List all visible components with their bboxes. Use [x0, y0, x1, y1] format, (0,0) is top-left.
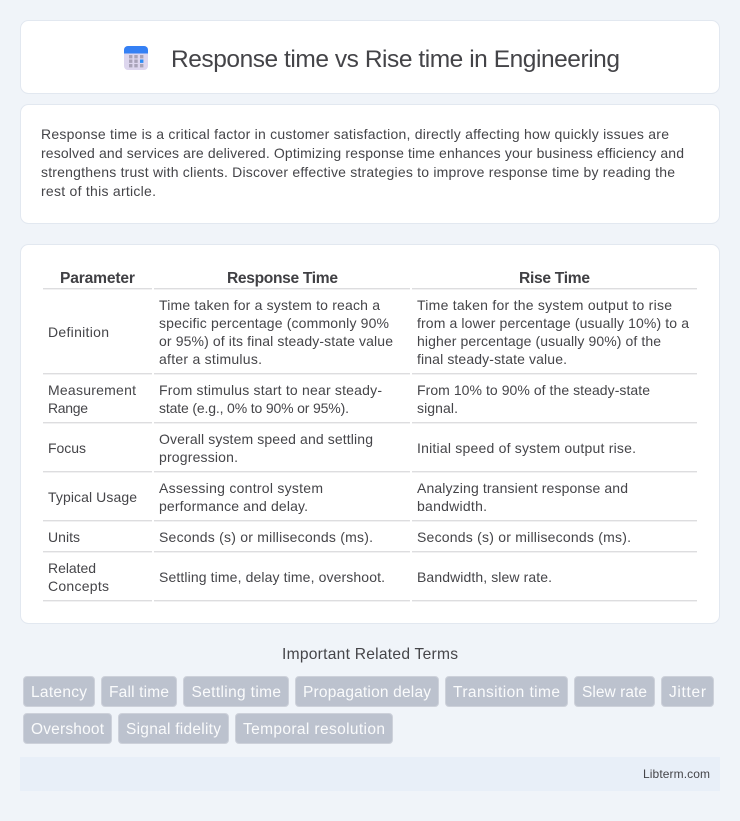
row: Typical Usage: Typical Usage: [48, 489, 137, 505]
row: Definition: after a stimulus.: [159, 351, 262, 367]
table header row: Rise Time: [519, 270, 590, 287]
tag: Propagation delay: Propagation delay: [303, 684, 431, 701]
heading: important related terms: Important Related Terms: [282, 646, 458, 663]
tag: Settling time: Settling time: [192, 684, 281, 701]
row: Definition: from a lower percentage (usually 10%) to a: [417, 315, 689, 331]
tag: Fall time: Fall time: [109, 684, 169, 701]
row: Units: Seconds (s) or milliseconds (ms).: [159, 529, 373, 545]
row: Measurement Range: From stimulus start to near steady-: [159, 382, 382, 398]
tag: Transition time: Transition time: [453, 684, 560, 701]
row: Measurement Range: From 10% to 90% of the steady-state: [417, 382, 650, 398]
tag: Temporal resolution: [236, 714, 392, 744]
row: Units: [48, 529, 631, 545]
row: Typical Usage: Assessing control system: [159, 480, 323, 496]
row: Units: Seconds (s) or milliseconds (ms).: [417, 529, 631, 545]
row: Typical Usage: performance and delay.: [159, 498, 308, 514]
tag: Signal fidelity: [118, 714, 228, 744]
table header row: Response Time: [227, 270, 338, 287]
panel: header: [20, 20, 720, 94]
row: Definition: or 95%) of its final steady-state value: [159, 333, 393, 349]
row: Focus: progression.: [159, 449, 238, 465]
row: Measurement Range: Range: [48, 400, 88, 416]
row: Definition: [48, 297, 689, 367]
tag: Signal fidelity: Signal fidelity: [126, 721, 221, 738]
row: Measurement Range: state (e.g., 0% to 90% or 95%).: [159, 400, 349, 416]
panel: intro text: [20, 104, 720, 224]
tag: Slew rate: [574, 676, 654, 706]
table header row: Parameter: [60, 270, 135, 287]
row: Definition: final steady-state value.: [417, 351, 567, 367]
row: Focus: [48, 431, 636, 465]
row: Related Concepts: Related: [48, 560, 96, 576]
footer credit: Libterm.com: [643, 767, 710, 781]
row: Focus: Overall system speed and settling: [159, 431, 373, 447]
row: Focus: Initial speed of system output rise.: [417, 440, 636, 456]
intro paragraph: rest of this article.: [41, 183, 156, 199]
tag: Slew rate: Slew rate: [582, 684, 647, 701]
row: Typical Usage: [48, 480, 628, 514]
icon: calendar: [124, 46, 148, 70]
row: Definition: higher percentage (usually 90%) of the: [417, 333, 661, 349]
tag: Propagation delay: [296, 676, 438, 706]
row: Measurement Range: signal.: [417, 400, 458, 416]
row: Typical Usage: Analyzing transient response and: [417, 480, 628, 496]
row: Related Concepts: Settling time, delay time, overshoot.: [159, 569, 385, 585]
footer bar: [20, 757, 720, 791]
table header row: [60, 270, 590, 287]
tag: Overshoot: Overshoot: [31, 721, 105, 738]
title: Response time vs Rise time in Engineering: [171, 46, 620, 73]
intro paragraph: resolved and services are delivered. Optimizing response time enhances your business efficiency and: [41, 145, 684, 161]
tag: Transition time: [446, 676, 568, 706]
row: Units: Units: [48, 529, 80, 545]
tag: Overshoot: [24, 714, 112, 744]
row: Definition: Time taken for the system output to rise: [417, 297, 672, 313]
row: Definition: Time taken for a system to reach a: [159, 297, 380, 313]
row: Measurement Range: [48, 382, 650, 416]
intro paragraph: [41, 126, 684, 199]
row: Focus: Focus: [48, 440, 86, 456]
row: Definition: Definition: [48, 324, 109, 340]
intro paragraph: Response time is a critical factor in customer satisfaction, directly affecting how quickly issues are: [41, 126, 669, 142]
row: Related Concepts: [48, 560, 552, 594]
tag: Fall time: [102, 676, 176, 706]
intro paragraph: strengthens trust with clients. Discover effective strategies to improve response time by reading the: [41, 164, 675, 180]
row: Typical Usage: bandwidth.: [417, 498, 487, 514]
tag: Latency: [24, 676, 94, 706]
tag: Temporal resolution: Temporal resolution: [243, 721, 385, 738]
panel: comparison table: [20, 244, 720, 624]
row: Measurement Range: Measurement: [48, 382, 136, 398]
row: Related Concepts: Concepts: [48, 578, 109, 594]
row: Related Concepts: Bandwidth, slew rate.: [417, 569, 552, 585]
tag list: [24, 676, 714, 744]
tag: Settling time: [184, 676, 288, 706]
row: Definition: specific percentage (commonly 90%: [159, 315, 389, 331]
tag: Latency: Latency: [31, 684, 87, 701]
tag: Jitter: [662, 676, 714, 706]
tag: Jitter: Jitter: [669, 684, 706, 701]
